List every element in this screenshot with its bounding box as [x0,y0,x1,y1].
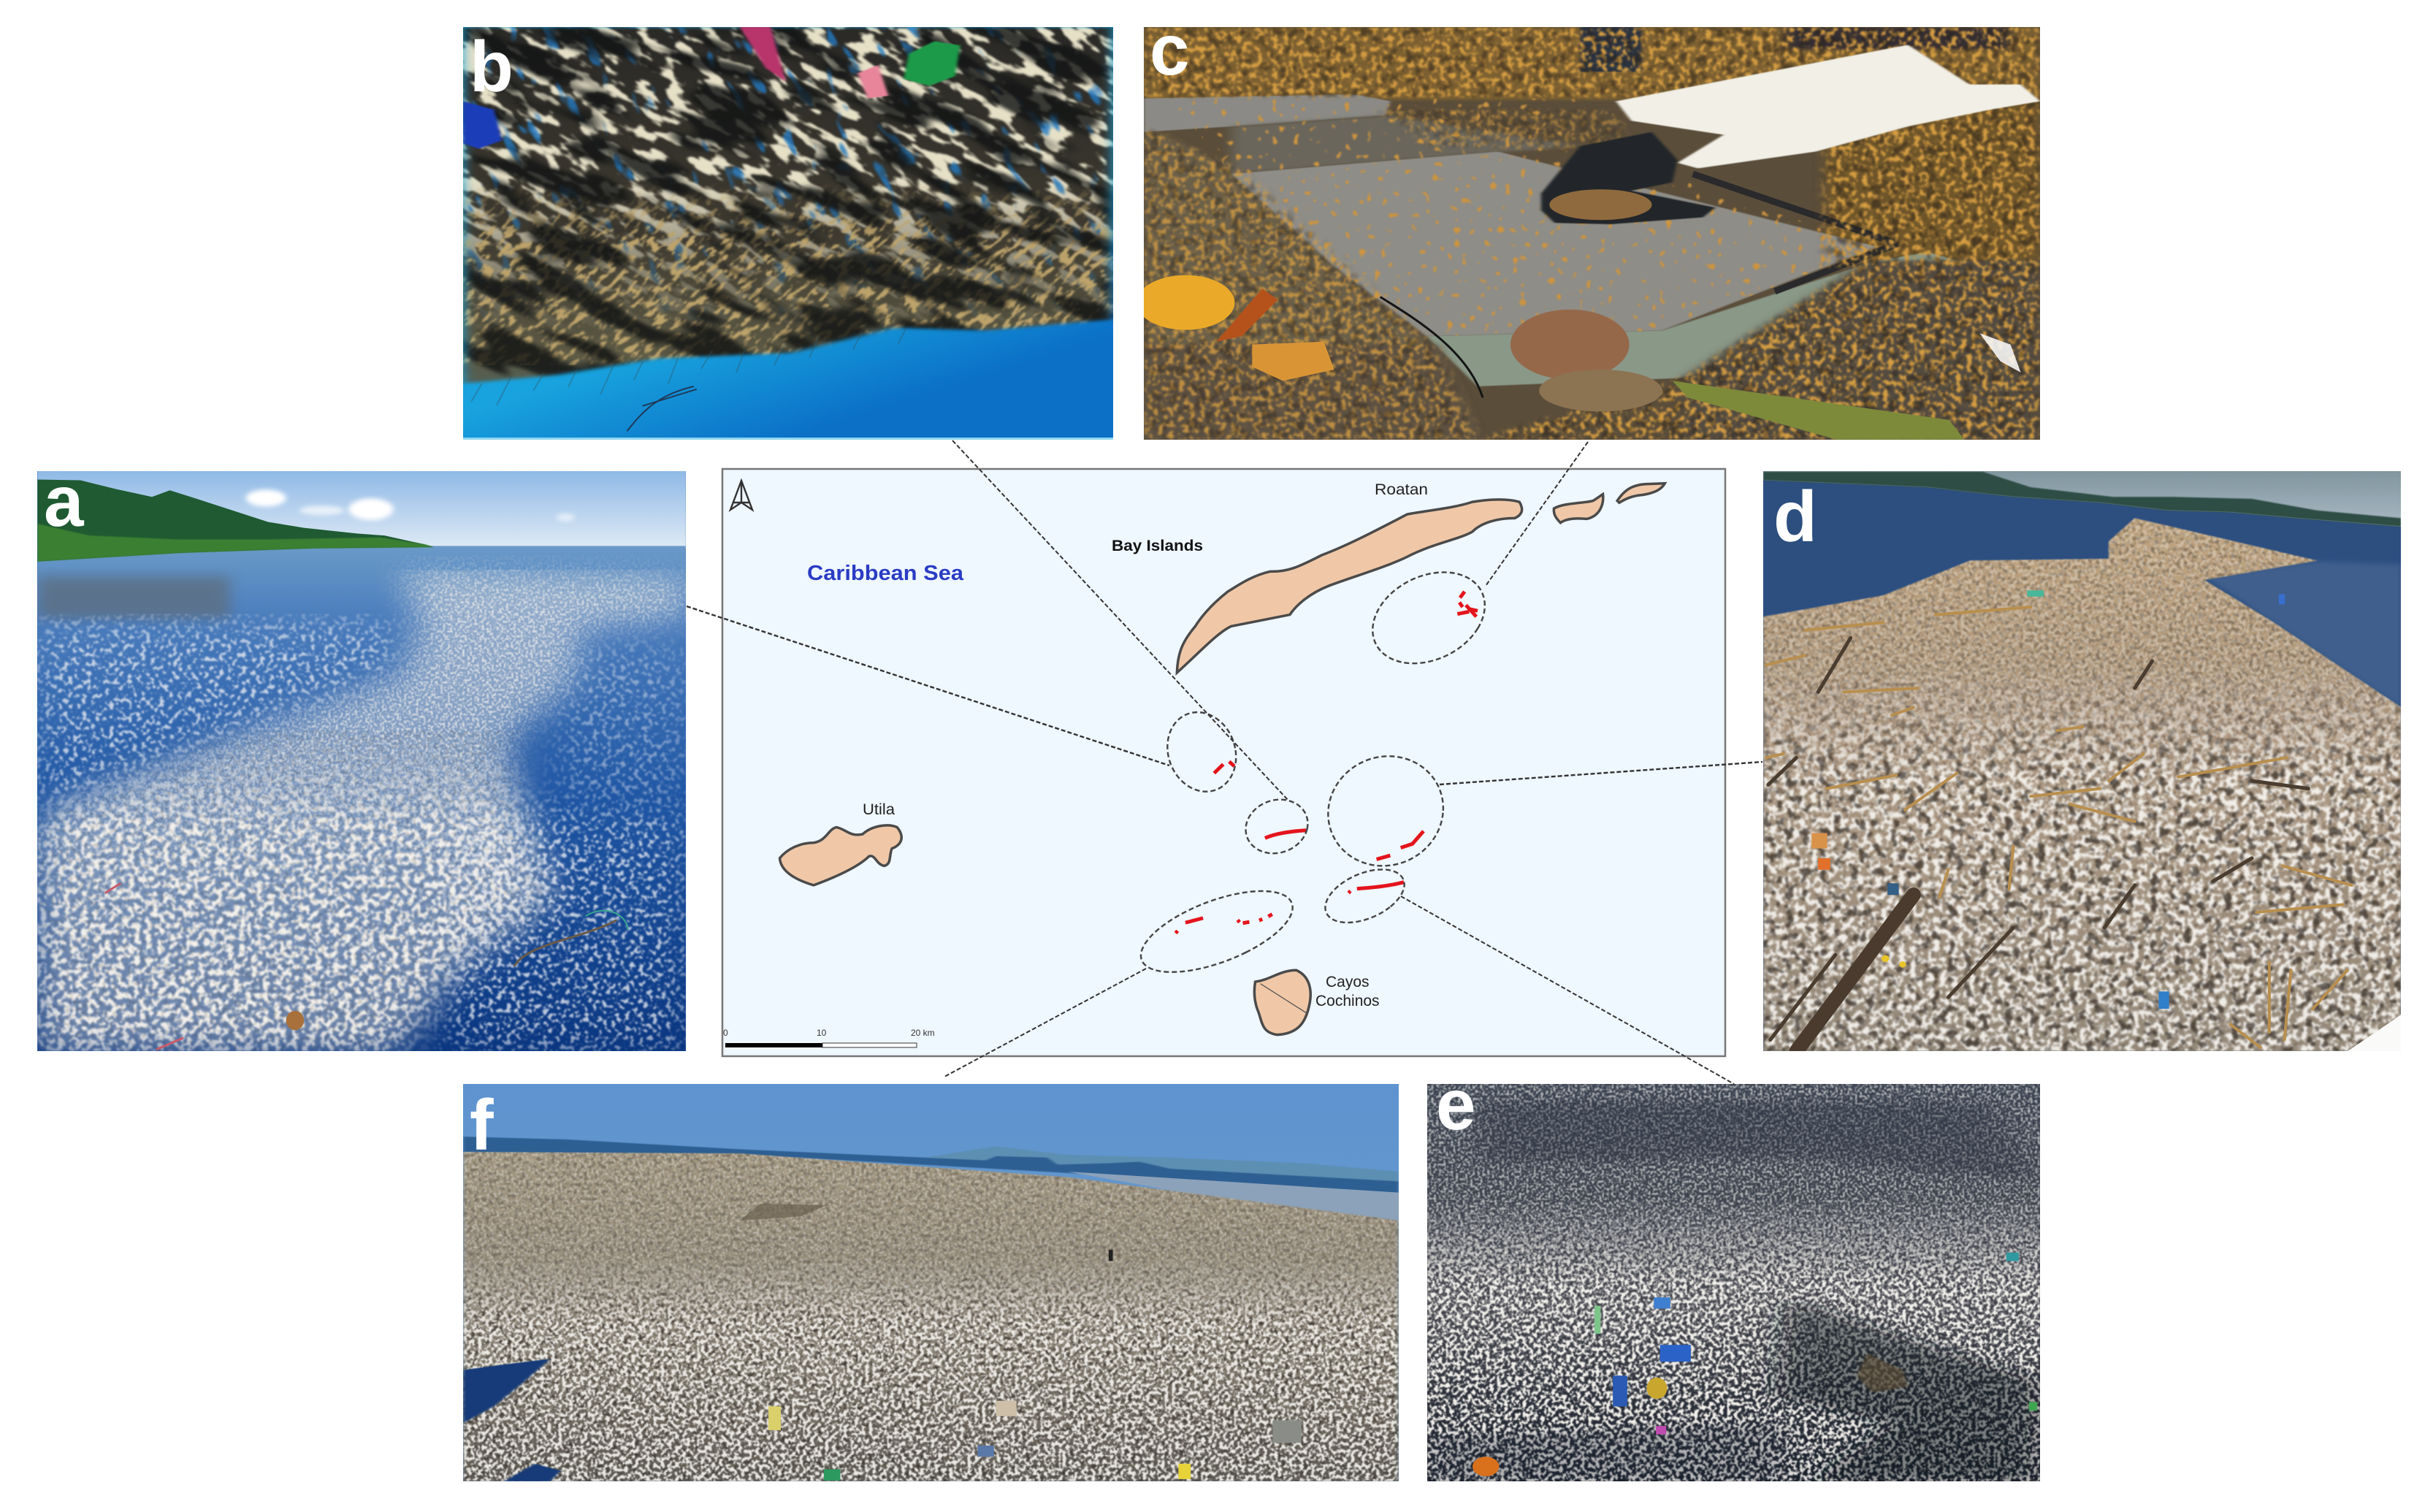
turtle [1541,132,1715,224]
photo f: debris field beneath hazy blue sky [463,1084,1399,1481]
letter d: d [1773,476,1817,557]
label: Cayos Cochinos: Cochinos [1315,993,1380,1009]
coloured plastic pieces [1660,1345,1691,1362]
letter b: b [470,26,513,107]
photo a: pale debris slick on blue sea near a green headland [37,471,686,1051]
hanging fibres below raft [471,329,906,405]
north arrow [730,481,752,510]
scale bar: 0 [723,1028,728,1038]
photo c: turtle entangled in plastic sheet and sargassum [1137,27,2040,440]
connector: map to photo a [687,606,1169,765]
survey ellipses [1118,563,1505,987]
connector: map to photo c [1486,442,1588,586]
label: Roatan: Roatan [1375,481,1428,498]
bottle: green [904,41,960,86]
leaf [1673,381,1964,440]
plastic bag [1616,45,2040,168]
letter e: e [1436,1064,1476,1145]
yellow float [1137,275,1234,330]
sponge [1510,310,1630,379]
connector: map to photo d [1440,762,1762,784]
debris patches (red) [1176,592,1478,933]
scale bar: 10 [817,1028,827,1038]
label: Caribbean Sea: Caribbean Sea [807,562,964,585]
connector: map to photo f [944,969,1146,1077]
photo d: thick raft of straw and plastic debris [1763,471,2401,1051]
connector: map to photo b [952,440,1288,801]
label: Bay Islands: Bay Islands [1112,538,1203,554]
map panel: Bay Islands [722,469,1725,1056]
photo b: underwater view of floating debris raft [463,27,1113,440]
label: Cayos Cochinos: Cayos [1326,974,1370,990]
straw and logs [1766,607,2352,1047]
map background [722,469,1725,1056]
letter f: f [470,1085,494,1165]
letter a: a [44,461,85,541]
scale bar [723,1028,935,1047]
islands [780,484,1665,1035]
letter c: c [1150,9,1190,90]
label: Utila: Utila [863,801,895,818]
strip: pink [740,27,786,82]
connector: map to photo e [1401,896,1734,1084]
photo e: dense plastic flakes on dark water [1427,1084,2040,1481]
scale bar: 20 km [911,1028,935,1038]
